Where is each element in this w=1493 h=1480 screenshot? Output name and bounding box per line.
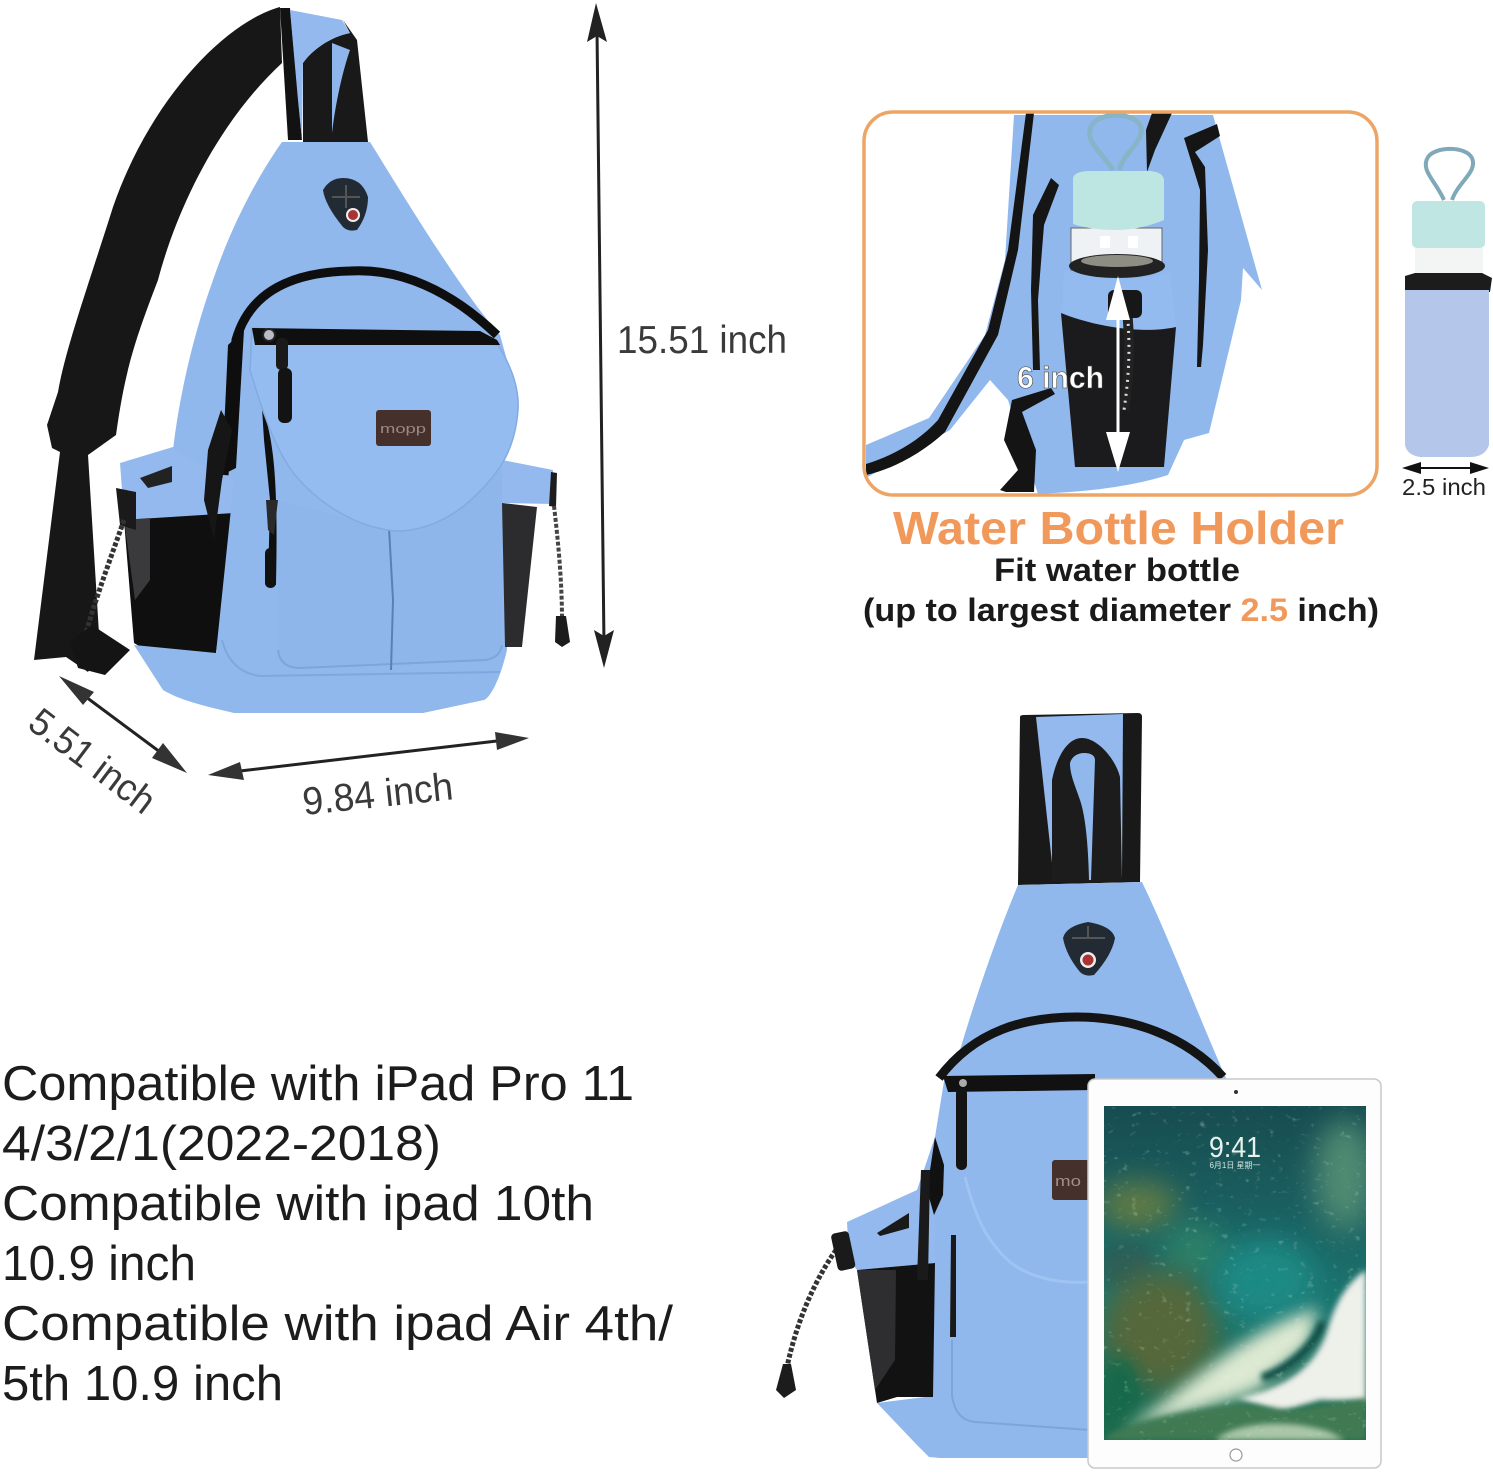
- bag body: [134, 142, 518, 713]
- bag: main front view: [34, 7, 570, 713]
- brand label: mopp: [380, 421, 426, 436]
- bag: front view with tablet: [776, 713, 1381, 1468]
- standalone water bottle: [1405, 149, 1492, 457]
- front flap: [250, 328, 518, 531]
- tablet screen: [1097, 1106, 1375, 1440]
- width label: 9.84 inch: [300, 765, 455, 824]
- lower pocket seam: [952, 1340, 1090, 1430]
- lower front pocket: [222, 470, 502, 676]
- compatibility text block: Compatible with iPad Pro 11: [2, 1057, 634, 1111]
- compatibility text block: Compatible with ipad 10th: [2, 1177, 594, 1231]
- bottle diameter arrow: [1402, 462, 1489, 474]
- left side pocket: [70, 447, 234, 675]
- compatibility text block: 4/3/2/1(2022-2018): [2, 1117, 441, 1171]
- heading: water bottle holder: Water Bottle Holder: [893, 502, 1344, 554]
- drawcord with stopper: [776, 1231, 856, 1398]
- tablet home button: [1230, 1449, 1242, 1461]
- top handle strap: [1018, 713, 1142, 885]
- 6 inch label: 6 inch: [1017, 360, 1104, 395]
- side pocket: [847, 1190, 935, 1403]
- round port badge: [323, 178, 368, 231]
- top zipper arc: [224, 271, 497, 475]
- tablet date: 6月1日 星期一: [1209, 1161, 1261, 1170]
- height label: 15.51 inch: [617, 319, 787, 362]
- panel border: [864, 112, 1377, 495]
- top zipper arc: [939, 1017, 1223, 1078]
- side zipper: [917, 1137, 956, 1337]
- depth arrow: [59, 676, 187, 773]
- cord with stopper: [1108, 290, 1142, 410]
- flap seam: [965, 1177, 1090, 1282]
- side zipper: [204, 330, 278, 588]
- text: largest diameter note: (up to largest diameter 2.5 inch): [863, 592, 1379, 628]
- panel: water bottle holder close-up: [864, 112, 1377, 495]
- compatibility text block: Compatible with ipad Air 4th/: [2, 1297, 673, 1351]
- compatibility text block: [2, 1057, 673, 1411]
- width arrow: [208, 732, 529, 780]
- 6 inch measure arrow: [1106, 276, 1130, 472]
- brand label: [376, 410, 431, 446]
- flap zipper: [943, 1074, 1095, 1170]
- height arrow: [587, 3, 614, 668]
- tablet: [1088, 1079, 1381, 1468]
- brand label: [1052, 1160, 1090, 1200]
- text: fit water bottle: Fit water bottle: [994, 552, 1240, 588]
- compatibility text block: 10.9 inch: [2, 1237, 196, 1291]
- brand label: mo: [1055, 1173, 1081, 1190]
- shoulder strap: [34, 7, 368, 672]
- bottle diameter label: 2.5 inch: [1402, 474, 1486, 500]
- tablet camera: [1234, 1090, 1238, 1094]
- round port badge: [1063, 922, 1115, 976]
- bottle in pocket: [1069, 115, 1165, 278]
- mesh pocket: [1061, 313, 1176, 467]
- depth label: 5.51 inch: [21, 701, 163, 823]
- compatibility text block: 5th 10.9 inch: [2, 1357, 283, 1411]
- right side pocket: [502, 460, 570, 647]
- bag body: [877, 882, 1226, 1458]
- bag side view: [866, 113, 1262, 494]
- tablet clock: 9:41: [1209, 1132, 1261, 1164]
